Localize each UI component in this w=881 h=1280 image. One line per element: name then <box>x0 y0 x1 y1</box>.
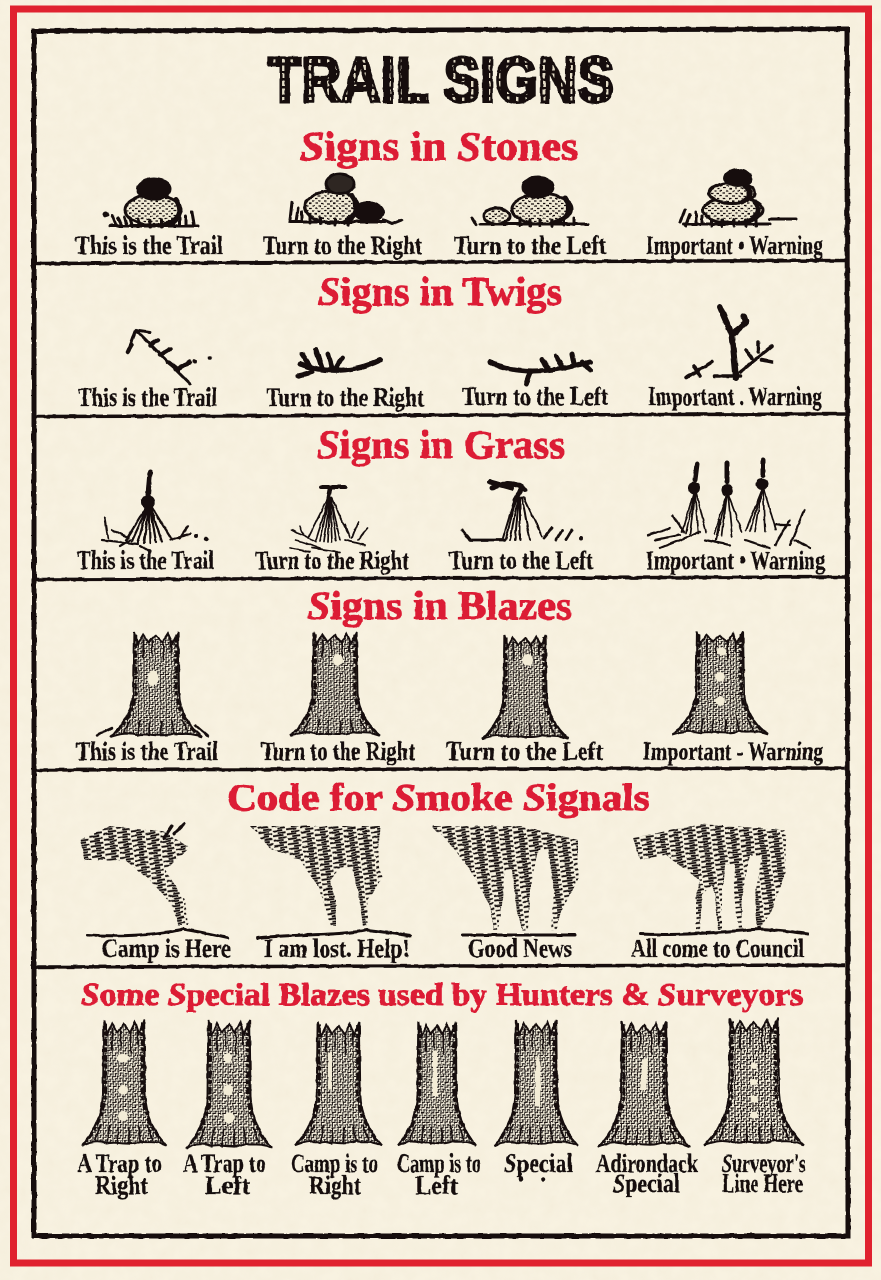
label: Turn to the Right <box>266 383 424 412</box>
panel: signs in blazes <box>76 583 823 766</box>
label: Turn to the Right <box>261 737 415 766</box>
divider <box>35 768 845 770</box>
label: Camp is to <box>291 1149 378 1178</box>
icon: smoke, camp is here <box>80 824 228 938</box>
icon: grass, turn to the left <box>462 482 583 540</box>
label: Adirondack <box>596 1149 698 1178</box>
label: Left <box>415 1171 458 1200</box>
label: Special <box>504 1149 573 1178</box>
icon: stones, important warning <box>680 170 796 226</box>
label: Left <box>205 1171 250 1200</box>
icon: tree, a trap to left <box>186 1020 272 1148</box>
label: Important • Warning <box>646 546 825 575</box>
icon: twig, important warning <box>686 307 772 378</box>
label: All come to Council <box>631 934 804 963</box>
label: I am lost. Help! <box>264 934 410 963</box>
icon: smoke, good news <box>430 826 578 935</box>
panel: signs in grass <box>77 422 825 575</box>
divider <box>35 414 845 416</box>
icon: grass, important warning <box>648 460 810 548</box>
label: A Trap to <box>183 1149 266 1178</box>
divider <box>35 577 845 580</box>
icon: tree, adirondack special <box>598 1021 690 1147</box>
label: Surveyor's <box>722 1149 806 1178</box>
label: Good News <box>468 934 572 963</box>
icon: grass, this is the trail <box>102 472 208 552</box>
label: Turn to the Left <box>462 382 608 411</box>
label: Important • Warning <box>646 231 823 260</box>
icon: tree, special <box>494 1020 578 1146</box>
label: A Trap to <box>77 1149 162 1178</box>
icon: tree, turn to the right <box>290 632 380 736</box>
panel: signs in twigs <box>78 269 822 412</box>
panel: signs in stones <box>75 123 823 260</box>
icon: tree, a trap to right <box>82 1020 166 1146</box>
label: This is the Trail <box>77 546 214 575</box>
label: Turn to the Right <box>263 231 422 260</box>
label: Important - Warning <box>643 737 823 766</box>
divider <box>35 965 845 967</box>
heading: signs in blazes: Signs in Blazes <box>307 583 572 628</box>
label: Right <box>309 1171 361 1200</box>
heading: signs in stones: Signs in Stones <box>300 123 578 169</box>
icon: tree, camp is to left <box>398 1022 476 1145</box>
icon: twig, turn to the right <box>298 350 380 376</box>
icon: twig, this is the trail <box>128 330 212 384</box>
icon: stones, this is the trail <box>103 179 198 227</box>
heading: code for smoke signals: Code for Smoke Signals <box>227 777 650 819</box>
label: Important . Warning <box>648 382 822 411</box>
label: Camp is to <box>397 1149 481 1178</box>
label: Turn to the Left <box>446 737 603 766</box>
icon: smoke, i am lost help <box>250 826 410 938</box>
icon: grass, turn to the right <box>290 487 368 552</box>
heading: special blazes: Some Special Blazes used by Hunters & Surveyors <box>81 976 803 1012</box>
icon: twig, turn to the left <box>490 354 590 384</box>
label: Line Here <box>722 1169 803 1198</box>
label: Special <box>613 1169 680 1198</box>
icon: smoke, all come to council <box>633 824 808 935</box>
label: Right <box>95 1171 148 1200</box>
title: TRAIL SIGNS <box>268 44 614 116</box>
heading: signs in grass: Signs in Grass <box>317 422 565 467</box>
icon: stones, turn to the right <box>290 174 402 225</box>
icon: two dots <box>519 1177 545 1181</box>
label: This is the Trail <box>76 737 218 766</box>
icon: tree, surveyors line here <box>704 1018 804 1145</box>
icon: tree, important warning <box>672 632 768 734</box>
label: This is the Trail <box>75 231 223 260</box>
panel: code for smoke signals <box>80 777 808 963</box>
label: Turn to the Left <box>449 546 593 575</box>
icon: stones, turn to the left <box>472 177 588 226</box>
label: Camp is Here <box>102 934 231 963</box>
icon: tree, turn to the left <box>482 635 568 739</box>
label: Turn to the Right <box>255 546 409 575</box>
divider <box>35 260 845 264</box>
label: Turn to the Left <box>454 231 606 260</box>
heading: signs in twigs: Signs in Twigs <box>318 269 562 314</box>
panel: special blazes <box>77 976 806 1200</box>
icon: tree, camp is to right <box>295 1022 382 1145</box>
icon: tree, this is the trail <box>97 632 208 737</box>
label: This is the Trail <box>78 383 217 412</box>
